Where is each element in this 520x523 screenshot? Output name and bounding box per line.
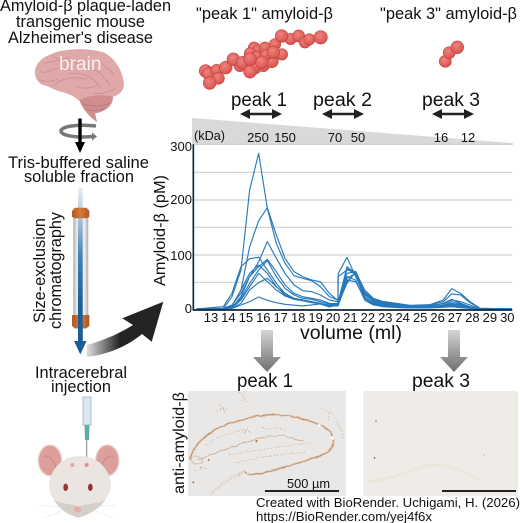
molecular weight wedge: 70: [328, 130, 342, 145]
label: peak 3 range: peak 3: [422, 90, 480, 111]
x-axis ticks: 20: [326, 310, 340, 325]
text: soluble fraction: soluble fraction: [24, 168, 134, 186]
icon: peak 3 aggregate: [439, 41, 464, 67]
x-axis title: volume (ml): [300, 322, 402, 344]
x-axis ticks: 15: [239, 310, 253, 325]
x-axis ticks: 14: [221, 310, 236, 325]
molecular weight wedge: 250: [247, 130, 269, 145]
molecular weight wedge: 150: [274, 130, 296, 145]
icon: syringe: [83, 397, 91, 464]
text: intracerebral injection: injection: [51, 378, 111, 396]
label: peak 2 range: peak 2: [313, 90, 372, 111]
title: peak 3 amyloid: "peak 3" amyloid-β: [380, 5, 517, 23]
y-axis ticks: 100: [170, 248, 192, 263]
credit text: Created with BioRender. Uchigami, H. (2026): [256, 495, 520, 510]
x-axis ticks: 13: [204, 310, 218, 325]
heading: peak 1 photo: peak 1: [237, 371, 293, 392]
x-axis ticks: 17: [273, 310, 288, 325]
heading: source mouse: transgenic mouse: [16, 13, 145, 31]
heading: source mouse: [0, 0, 171, 47]
title: peak 1 amyloid: "peak 1" amyloid-β: [196, 5, 333, 23]
x-axis ticks: 23: [378, 310, 393, 325]
y-axis ticks: [170, 139, 192, 316]
molecular weight wedge: 16: [434, 130, 448, 145]
icon: peak 1 aggregate: [199, 30, 327, 89]
text: soluble fraction: [8, 154, 149, 186]
x-axis ticks: [204, 310, 515, 325]
x-axis ticks: 27: [448, 310, 462, 325]
line chart: [152, 139, 515, 344]
icon: chromatography column: [72, 188, 89, 354]
credit text: [256, 495, 520, 523]
text: size-exclusion chromatography: Size-exclusion: [31, 218, 49, 323]
x-axis ticks: 26: [430, 310, 445, 325]
photo: peak 3 micrograph: [363, 391, 518, 496]
arrow: peak 3 down: [440, 330, 468, 372]
brain label: brain: [59, 54, 102, 75]
scale bar: 500 µm: 500 µm: [287, 476, 330, 491]
y-axis ticks: 300: [170, 139, 192, 154]
x-axis ticks: 30: [500, 310, 515, 325]
x-axis ticks: 29: [483, 310, 497, 325]
heading: source mouse: Alzheimer's disease: [8, 29, 153, 47]
y-axis title: Amyloid-β (pM): [152, 175, 169, 286]
x-axis ticks: 21: [343, 310, 358, 325]
heading: peak 3 photo: peak 3: [412, 371, 470, 392]
x-axis ticks: 25: [413, 310, 427, 325]
scale bar: 500 µm: [265, 476, 339, 492]
icon: centrifuge rotation with down arrow: [61, 118, 97, 153]
photo: peak 1 micrograph: [188, 391, 346, 496]
x-axis ticks: 19: [308, 310, 323, 325]
x-axis ticks: 18: [291, 310, 305, 325]
molecular weight wedge: 12: [461, 130, 475, 145]
arrow: curved black arrow to chart: [87, 302, 163, 357]
text: size-exclusion chromatography: chromatography: [47, 211, 65, 329]
rotated label: anti-amyloid: anti-amyloid-β: [170, 392, 188, 494]
molecular weight wedge: (kDa): [194, 129, 225, 143]
arrow: peak 1 down: [253, 330, 281, 372]
x-axis ticks: 22: [361, 310, 375, 325]
x-axis ticks: 24: [395, 310, 410, 325]
x-axis ticks: 28: [465, 310, 480, 325]
y-axis ticks: 0: [185, 301, 192, 316]
x-axis ticks: 16: [256, 310, 271, 325]
y-axis ticks: 200: [170, 192, 192, 207]
molecular weight wedge: 50: [351, 130, 365, 145]
molecular weight wedge: [192, 118, 513, 145]
text: intracerebral injection: [35, 364, 127, 396]
text: soluble fraction: Tris-buffered saline: [8, 154, 149, 172]
label: peak 1 range: peak 1: [231, 90, 287, 111]
text: intracerebral injection: Intracerebral: [35, 364, 127, 382]
icon: brain: [35, 49, 124, 122]
scale bar: peak 3: [442, 490, 516, 492]
text: size-exclusion chromatography: [31, 211, 65, 329]
icon: mouse: [38, 445, 119, 518]
